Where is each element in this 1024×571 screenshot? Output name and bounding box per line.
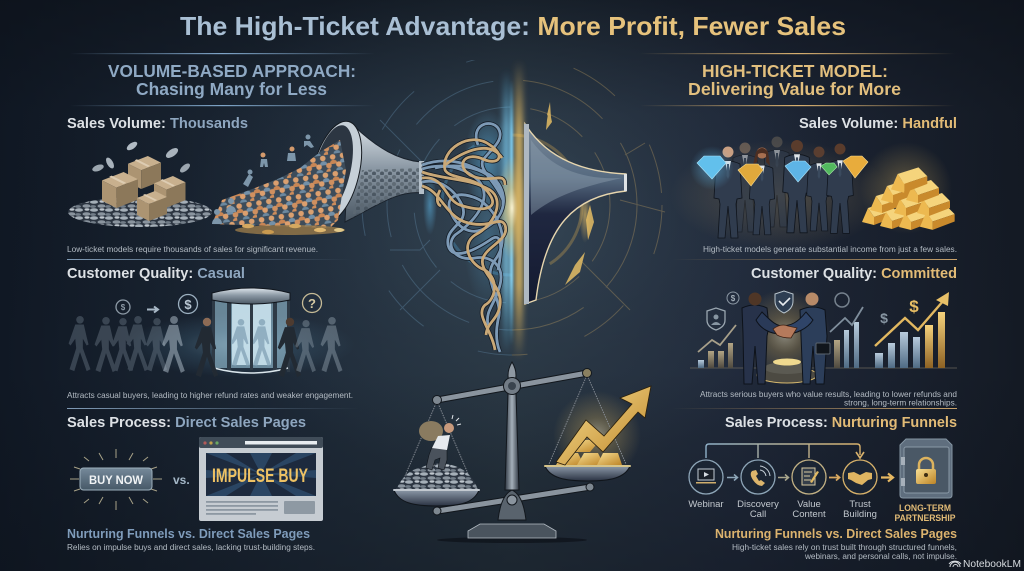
- panel: right header: Delivering Value for More: [688, 79, 901, 99]
- sales process direct heading: Sales Process: Direct Sales Pages: [67, 414, 306, 431]
- icon: coins and boxes pile: [68, 140, 212, 227]
- panel: left header: VOLUME-BASED APPROACH:: [108, 61, 356, 81]
- text: left footer: Nurturing Funnels vs. Direct Sales Pages: [67, 527, 310, 541]
- text: serious buyers note: strong, long-term relationships.: [844, 398, 957, 408]
- step: value content: [792, 460, 826, 520]
- logo: NotebookLM: NotebookLM: [963, 558, 1021, 570]
- center divider with circuit rings: [362, 55, 665, 360]
- text: right footer: High-ticket sales rely on trust built through structured funnels,: [732, 542, 957, 552]
- sales volume handful heading: Sales Volume: Handful: [799, 115, 957, 132]
- step: discovery call: [737, 460, 779, 520]
- browser window: impulse buy: IMPULSE BUY: [212, 466, 308, 487]
- text: left footer: [67, 527, 315, 552]
- icon: gold bars pyramid: [860, 142, 955, 234]
- step: trust building: [843, 460, 877, 520]
- panel: right header: [640, 53, 955, 106]
- icon: handshake on podium with growth charts: [690, 289, 957, 384]
- icon: handshake on podium with growth charts: $: [880, 310, 888, 326]
- step: value content: Content: [792, 509, 826, 520]
- text: left footer: Relies on impulse buys and direct sales, lacking trust-building steps.: [67, 542, 315, 552]
- text: casual buyers note: Attracts casual buyers, leading to higher refund rates and weaker engagement.: [67, 390, 353, 400]
- icon: revolving door with casual buyers: ?: [308, 296, 316, 311]
- button: buy now with rays: BUY NOW: [89, 473, 144, 487]
- text: right footer: Nurturing Funnels vs. Direct Sales Pages: [715, 527, 957, 541]
- icon: revolving door with casual buyers: [69, 288, 355, 377]
- step: webinar: Webinar: [688, 499, 724, 510]
- icon: executives holding gems: [670, 136, 890, 250]
- icon: balance scale: [393, 362, 651, 543]
- sales volume thousands heading: Sales Volume: Thousands: [67, 115, 248, 132]
- icon: tangled wires: [422, 123, 506, 352]
- panel: left header: [70, 53, 375, 106]
- icon: sleek dark horn: [524, 124, 627, 304]
- step: value content: Value: [797, 499, 821, 510]
- panel: left header: Chasing Many for Less: [136, 79, 327, 99]
- step: trust building: Building: [843, 509, 877, 520]
- icon: silver funnel with crowd: [212, 116, 424, 235]
- icon: revolving door with casual buyers: $: [184, 297, 192, 312]
- icon: long-term partnership safe: PARTNERSHIP: [894, 513, 956, 524]
- step: discovery call: Discovery: [737, 499, 779, 510]
- text: right footer: webinars, and personal calls, not impulse.: [804, 551, 957, 561]
- text: high-ticket note: High-ticket models generate substantial income from just a few sales.: [703, 244, 957, 254]
- icon: handshake on podium with growth charts: $: [731, 294, 736, 303]
- text: low-ticket note: Low-ticket models require thousands of sales for significant revenue.: [67, 244, 318, 254]
- text: vs label: vs.: [173, 473, 190, 487]
- button: buy now with rays: [70, 449, 162, 510]
- step: discovery call: Call: [750, 509, 766, 520]
- panel: right header: HIGH-TICKET MODEL:: [702, 61, 888, 81]
- browser window: impulse buy: [199, 437, 323, 521]
- icon: handshake on podium with growth charts: $: [909, 297, 919, 316]
- text: serious buyers note: [700, 389, 957, 408]
- customer quality committed heading: Customer Quality: Committed: [751, 265, 957, 282]
- icon: long-term partnership safe: LONG-TERM: [899, 503, 951, 514]
- flowchart: nurturing funnel steps: [688, 439, 956, 524]
- text: right footer: [715, 527, 957, 561]
- customer quality casual heading: Customer Quality: Casual: [67, 265, 245, 282]
- text: serious buyers note: Attracts serious buyers who value results, leading to lower refunds and: [700, 389, 957, 399]
- sales process nurturing heading: Sales Process: Nurturing Funnels: [725, 414, 957, 431]
- title: The High-Ticket Advantage: More Profit, Fewer Sales: [180, 11, 846, 41]
- icon: long-term partnership safe: [894, 439, 956, 524]
- step: webinar: [688, 460, 724, 510]
- step: trust building: Trust: [849, 499, 871, 510]
- icon: revolving door with casual buyers: $: [121, 303, 126, 312]
